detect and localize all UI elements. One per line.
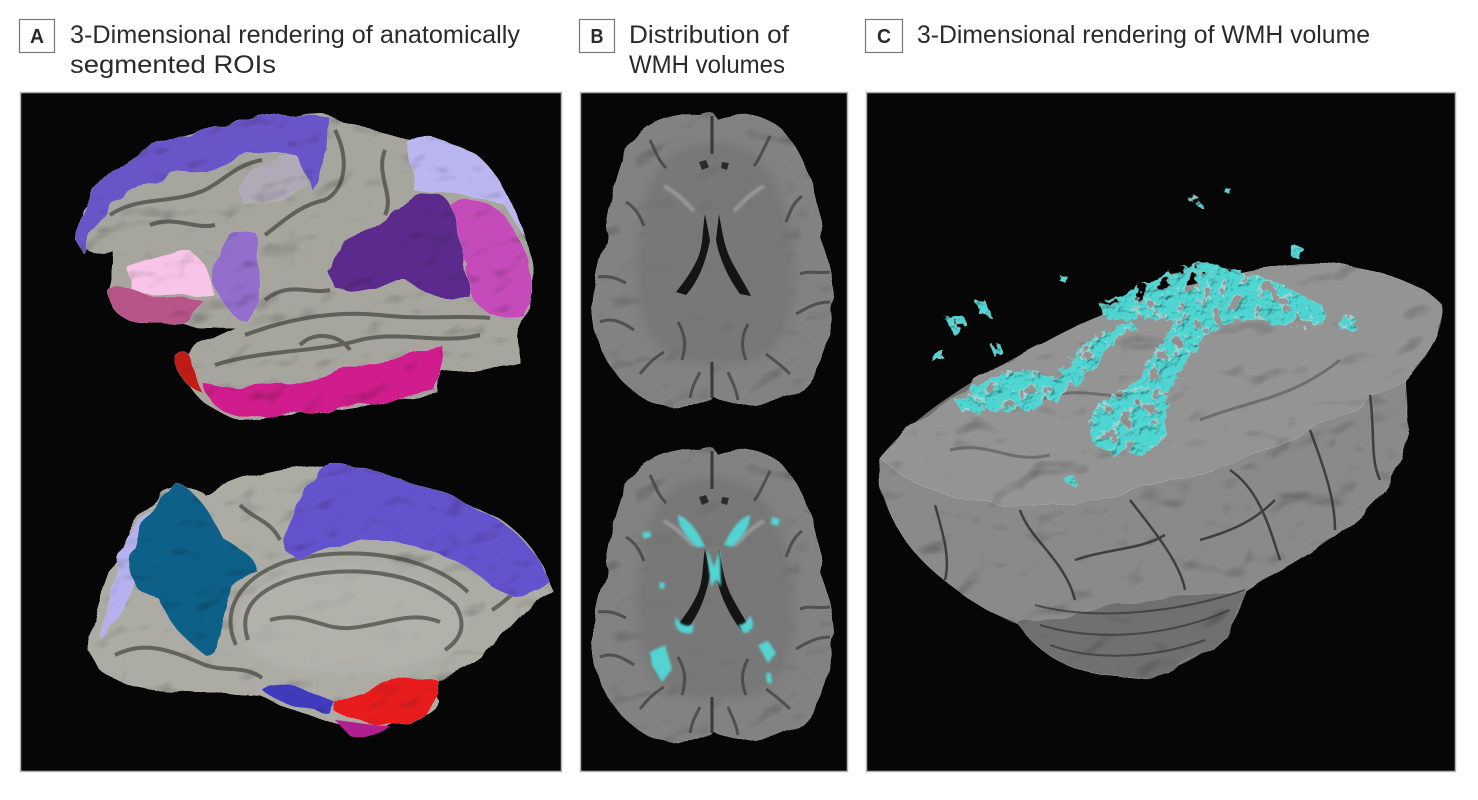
WMH overlay (642, 515, 780, 683)
medial brain surface (88, 463, 552, 737)
lateral brain surface (76, 114, 531, 420)
ROI: blue-purple superior frontal (284, 463, 552, 594)
ROI: blue fusiform (260, 683, 335, 714)
heading: panel B: B (590, 26, 604, 48)
panel: B axial WMH slices (580, 92, 848, 772)
heading: panel C: C (877, 26, 891, 48)
ROI: magenta inferior (335, 720, 390, 737)
ROI: rose orbital (108, 284, 205, 324)
axial slice with WMH overlay (594, 447, 833, 741)
heading: panel A (20, 20, 520, 79)
sulci: lateral surface (110, 130, 490, 365)
ROI: pale lavender medial (102, 510, 160, 640)
brain volume (880, 264, 1442, 676)
ROI: magenta occipital (448, 198, 531, 318)
ROI: pink opercular (128, 252, 215, 296)
heading: panel A: segmented ROIs (70, 51, 276, 79)
ROI: teal precuneus (130, 485, 255, 655)
panel: A segmented ROI renderings (20, 92, 562, 772)
heading: panel A: 3-Dimensional rendering of anatomically (70, 21, 520, 49)
heading: panel B (580, 20, 789, 79)
ROI: magenta temporal (205, 345, 442, 420)
sulci: volume surface (935, 395, 1380, 600)
heading: panel B: WMH volumes (629, 51, 785, 79)
pale lavender-gray gyrus (240, 155, 305, 205)
heading: panel B: Distribution of (629, 21, 789, 49)
ROI: red parahippocampal (335, 678, 440, 724)
WMH volume (930, 188, 1355, 484)
ROI: red temporal pole (176, 353, 206, 396)
ROI: dark purple angular gyrus (328, 193, 468, 299)
heading: panel C: 3-Dimensional rendering of WMH volume (917, 21, 1370, 49)
ROI: violet frontal (214, 230, 260, 322)
axial slice without overlay (594, 112, 833, 406)
sulci: medial surface (115, 505, 540, 678)
panel: C 3D WMH rendering (866, 92, 1456, 772)
ROI: pale lavender parietal (408, 136, 528, 240)
heading: panel A: A (30, 26, 44, 48)
ROI: dorsal frontal purple (76, 114, 328, 252)
